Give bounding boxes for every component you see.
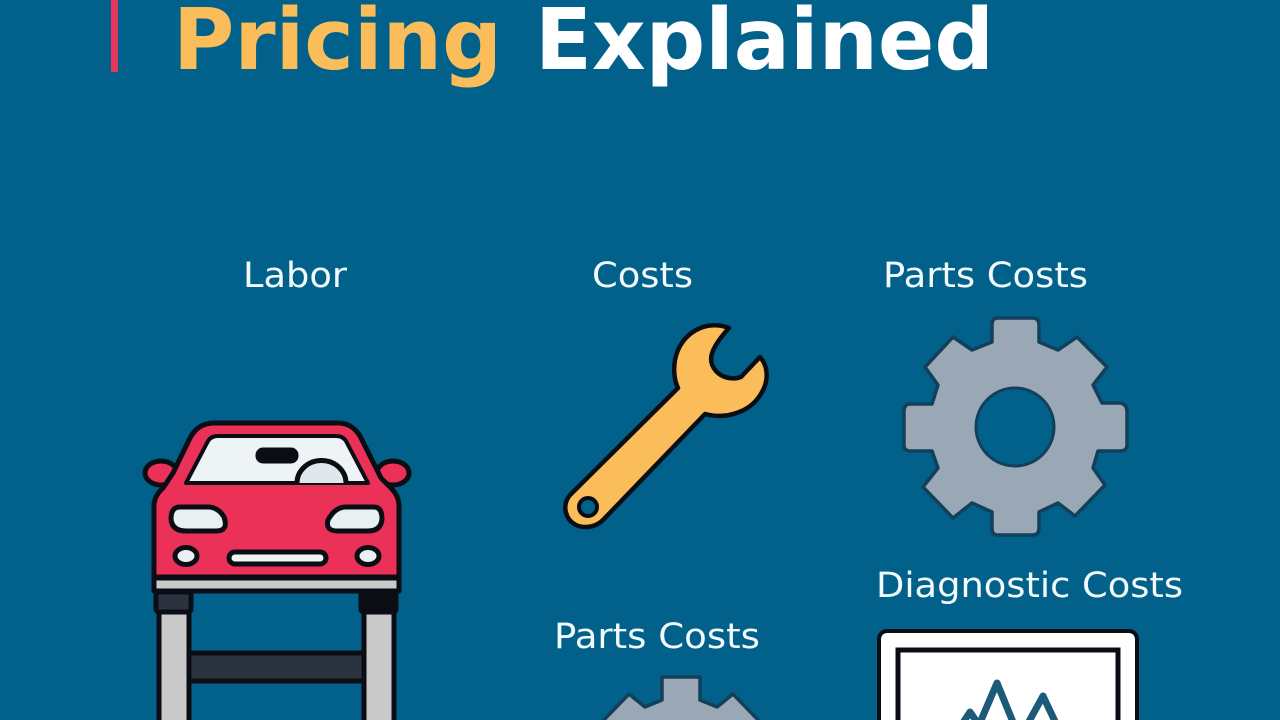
car body — [154, 423, 399, 577]
headlights — [171, 507, 382, 531]
rear-view mirror — [258, 450, 296, 461]
label: Parts Costs top: Parts Costs — [883, 256, 1088, 296]
icon: diagnostic monitor — [879, 631, 1137, 720]
icon: car on lift — [145, 423, 409, 720]
wrench hole — [579, 498, 597, 516]
waveform — [955, 683, 1060, 720]
monitor screen — [898, 650, 1118, 720]
gear hole — [976, 388, 1054, 466]
bumper — [154, 578, 399, 591]
icon: wrench — [565, 325, 767, 527]
title accent bar — [111, 0, 118, 72]
lift crossbar — [189, 653, 364, 681]
windshield — [186, 436, 368, 483]
fog lights — [175, 548, 379, 564]
icon: gear bottom — [600, 677, 762, 720]
steering wheel — [297, 461, 346, 483]
lift posts — [159, 610, 394, 720]
icon: gear top — [904, 318, 1127, 535]
lift pads — [156, 592, 396, 612]
label: Labor: Labor — [243, 256, 348, 296]
title — [173, 0, 994, 90]
mirrors — [145, 461, 409, 485]
label: Parts Costs bottom: Parts Costs — [554, 617, 760, 657]
label: Diagnostic Costs: Diagnostic Costs — [876, 566, 1183, 606]
label: Costs: Costs — [592, 256, 693, 296]
grille — [229, 552, 326, 564]
